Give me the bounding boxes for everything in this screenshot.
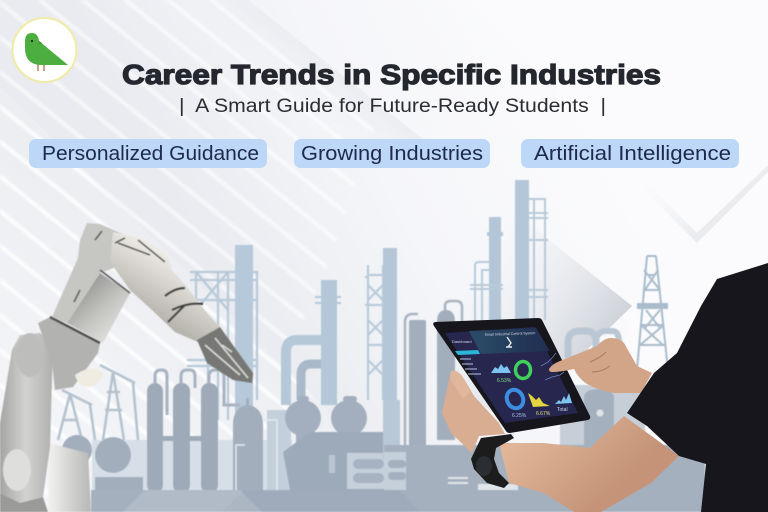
tablet screen [445,327,578,423]
protective wrap [52,223,135,323]
bird legs [38,64,44,71]
blue donut [504,387,526,411]
screen header [469,328,550,354]
left pump jacks and derricks [58,365,138,440]
reading 4: Total [557,407,568,413]
wrap shadows [74,231,165,302]
tower group middle [365,248,400,460]
bird body [25,33,68,65]
forearm [499,416,679,512]
gripper highlights [205,338,248,378]
screen title: Smart Industrial Control System [485,331,535,337]
tablet with hands [433,318,679,512]
watch face [476,456,492,476]
title: Career Trends in Specific Industries [122,59,661,90]
pill: personalized guidance [29,139,267,168]
robot column [0,333,53,503]
tank and block [233,398,291,492]
chimney A [235,245,253,435]
logo [12,18,76,82]
light blue area chart [491,364,511,373]
pointing hand [549,338,652,393]
robot arm [0,223,253,512]
sidebar label: Dashboard [452,339,472,344]
bird eye [31,40,33,42]
spherical tanks centre [285,396,367,455]
robot column foot [0,493,48,512]
menu items [460,359,481,374]
gripper [197,327,253,383]
logo badge [12,18,76,82]
forearm bands [165,288,203,322]
pill: growing industries: Growing Industries [301,143,483,165]
finger creases [590,352,610,372]
reading 3: 6.67% [536,411,551,417]
chimney B with pipes [286,280,341,405]
refinery ground mass [91,490,711,512]
shoulder ring [50,317,100,343]
yellow area chart [528,393,550,407]
mini robot icon [506,337,512,347]
refinery silhouette [58,180,711,512]
columns behind tablet [405,301,462,490]
pale ground haze behind columns [92,440,292,490]
robot upper joint disc [16,333,44,377]
robot joint disc [3,449,31,491]
left hand [442,371,505,453]
watch [471,434,514,488]
hoses and tank lower right [560,331,645,450]
line chart [541,353,564,380]
reading 2: 6.25% [512,413,527,419]
green donut [516,362,530,378]
pill: artificial intelligence: Artificial Intelligence [534,143,731,165]
processing building [283,432,384,490]
upper arm cylinder [67,273,130,343]
translucent diagonal overlays [123,490,420,512]
storage spheres, left [62,435,143,492]
pill: growing industries [294,139,490,168]
active menu item [455,350,480,355]
chimneys and frames right of centre [470,180,548,327]
derrick right [637,256,668,370]
left thumb over tablet [450,371,470,399]
pill: personalized guidance: Personalized Guidance [42,143,259,165]
distillation columns [147,383,218,493]
forearm [110,232,220,343]
subtitle: | A Smart Guide for Future-Ready Students | [179,96,606,117]
blue area chart right [555,393,572,404]
lattice tower A [187,272,257,420]
process pipes over columns [155,370,240,415]
robot shoulder [38,317,100,390]
reading 1: 6.53% [497,378,512,384]
robot base [48,443,91,512]
tablet body [433,318,590,433]
right ground mass [384,445,705,495]
pill: artificial intelligence [521,139,739,168]
person's dark shirt [627,263,768,512]
cream joint cap [75,368,103,387]
bird beak [39,41,42,45]
